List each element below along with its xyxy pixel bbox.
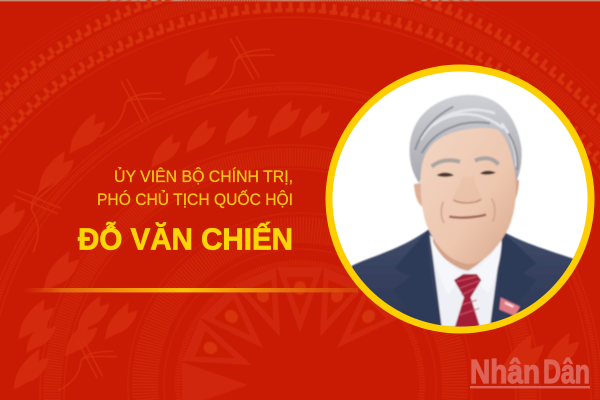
heading: position titles: ỦY VIÊN BỘ CHÍNH TRỊ, [114, 167, 293, 186]
white photo disc [332, 72, 588, 326]
gold ring [326, 64, 594, 334]
mouth [449, 215, 486, 218]
collar [429, 236, 444, 258]
face [421, 128, 516, 264]
watermark logo: Nhân [470, 353, 540, 390]
eyebrows [432, 160, 460, 167]
lapel pin [499, 297, 520, 316]
neck [432, 238, 484, 272]
tie [454, 274, 481, 327]
drum star [182, 267, 400, 400]
hair back [410, 95, 522, 185]
portrait medallion [326, 64, 594, 340]
ears [414, 183, 425, 207]
eyes [437, 173, 454, 177]
cheek folds [441, 198, 495, 223]
jacket [351, 229, 574, 327]
watermark logo [470, 353, 590, 390]
top edge line [0, 0, 600, 1]
portrait illustration [351, 94, 574, 327]
heading: position titles: PHÓ CHỦ TỊCH QUỐC HỘI [97, 189, 293, 209]
lapels [396, 230, 430, 275]
shirt [430, 235, 502, 327]
hair strands [420, 110, 517, 167]
nose [454, 178, 476, 201]
heading: name: ĐỖ VĂN CHIẾN [78, 220, 293, 256]
heading: position titles [97, 167, 293, 209]
gold divider rule [22, 288, 358, 292]
